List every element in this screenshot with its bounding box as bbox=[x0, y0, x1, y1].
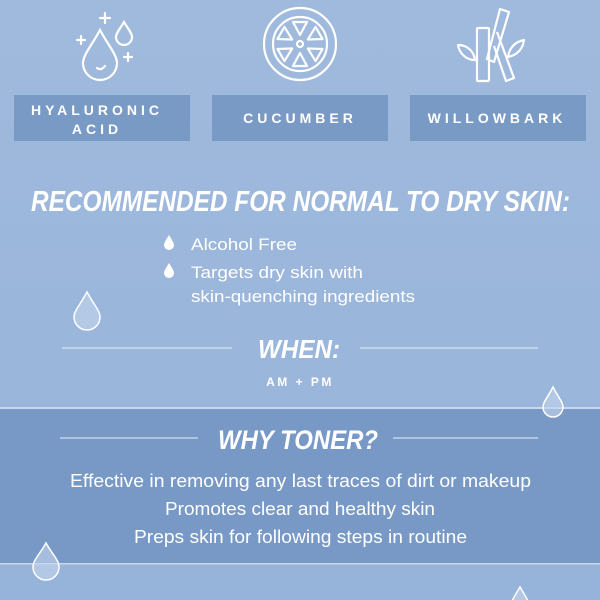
text block: reasons bbox=[70, 471, 531, 547]
box: hyaluronic acid: HYALURONIC bbox=[31, 102, 163, 118]
box: hyaluronic acid bbox=[14, 95, 190, 141]
heading: when: WHEN: bbox=[258, 334, 340, 364]
bullet list: skin-quenching ingredients bbox=[191, 287, 415, 306]
text block: reasons: Promotes clear and healthy skin bbox=[165, 499, 435, 519]
text block: reasons: Effective in removing any last traces of dirt or makeup bbox=[70, 471, 531, 491]
box: hyaluronic acid: ACID bbox=[72, 121, 122, 137]
bullet list: Alcohol Free bbox=[191, 235, 297, 254]
box: willowbark: WILLOWBARK bbox=[428, 110, 566, 126]
panel: why toner bbox=[0, 407, 600, 564]
decorative drops bbox=[33, 387, 563, 600]
box: willowbark bbox=[410, 95, 586, 141]
decorative drop left bbox=[74, 292, 100, 330]
heading: why toner: WHY TONER? bbox=[218, 425, 378, 455]
icon: hyaluronic droplets bbox=[77, 13, 132, 80]
box: cucumber: CUCUMBER bbox=[243, 110, 357, 126]
box: cucumber bbox=[212, 95, 388, 141]
icon: cucumber slice bbox=[264, 8, 336, 80]
bullet list bbox=[164, 235, 415, 306]
text block: reasons: Preps skin for following steps in routine bbox=[134, 527, 467, 547]
text: am pm: AM + PM bbox=[266, 375, 334, 389]
icon: willowbark bbox=[458, 9, 524, 81]
bullet list: Targets dry skin with bbox=[191, 263, 363, 282]
